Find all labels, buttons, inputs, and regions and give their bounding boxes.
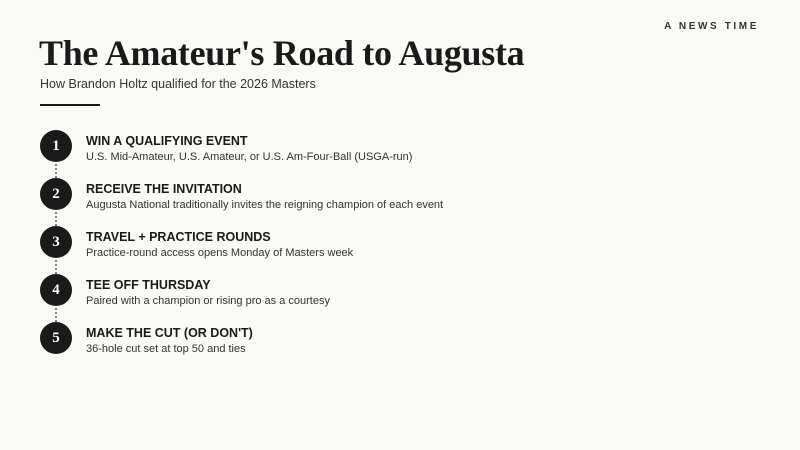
subtitle: How Brandon Holtz qualified for the 2026 Masters: [40, 77, 316, 91]
title: The Amateur's Road to Augusta: [39, 33, 524, 73]
step 4: 4: [52, 282, 60, 298]
step 2: [40, 178, 443, 211]
step 4: TEE OFF THURSDAY: [86, 278, 211, 292]
step 3: TRAVEL + PRACTICE ROUNDS: [86, 230, 271, 244]
step 2: 2: [52, 186, 60, 202]
step 5: [40, 322, 253, 355]
step 1: 1: [52, 138, 60, 154]
step 1: [40, 130, 412, 163]
step 4: [40, 274, 330, 307]
step 5: 36-hole cut set at top 50 and ties: [86, 343, 246, 355]
brand label: A NEWS TIME: [664, 21, 759, 32]
step 4: Paired with a champion or rising pro as a courtesy: [86, 295, 330, 307]
step 2: Augusta National traditionally invites the reigning champion of each event: [86, 199, 443, 211]
step 1: U.S. Mid-Amateur, U.S. Amateur, or U.S. Am-Four-Ball (USGA-run): [86, 151, 412, 163]
step 2: RECEIVE THE INVITATION: [86, 182, 242, 196]
step 3: 3: [52, 234, 60, 250]
step 5: MAKE THE CUT (OR DON'T): [86, 326, 253, 340]
step 5: 5: [52, 330, 60, 346]
step 3: [40, 226, 353, 259]
step 3: Practice-round access opens Monday of Masters week: [86, 247, 353, 259]
step 1: WIN A QUALIFYING EVENT: [86, 134, 248, 148]
